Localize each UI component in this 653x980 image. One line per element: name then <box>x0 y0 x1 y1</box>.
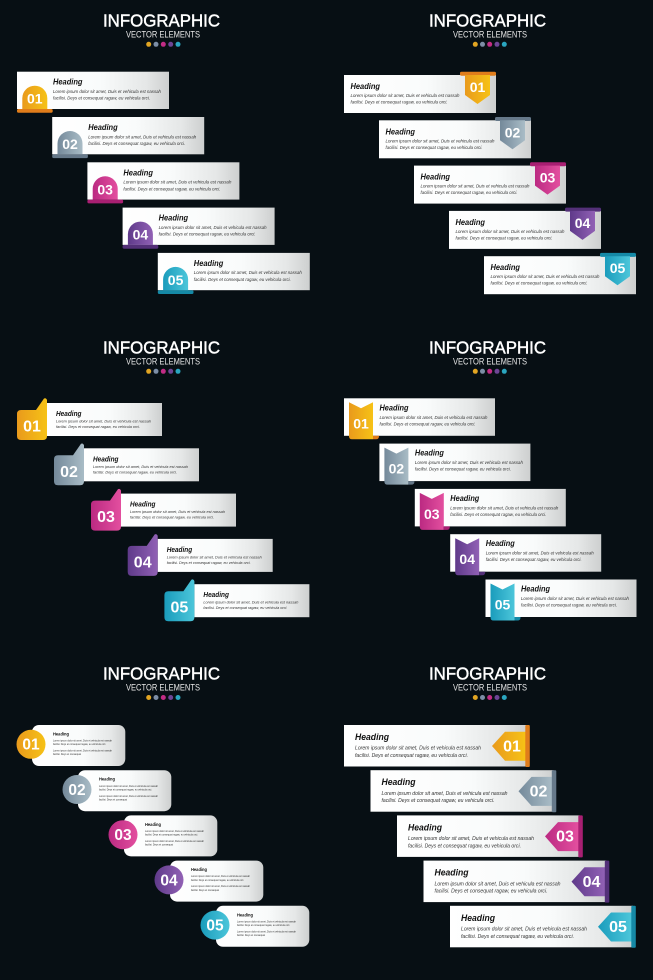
step 02: facilisi. Deys et consequat ragaw, eu vehicula orci. <box>88 141 185 146</box>
step 02 <box>52 117 204 158</box>
step 01: 01 <box>353 415 369 431</box>
step 03 <box>87 162 239 203</box>
step 04: Lorem ipsum dolor sit amet, Duis et vehicula est nassah <box>191 874 251 878</box>
step 05: Lorem ipsum dolor sit amet, Duis et vehicula est nassah <box>490 274 600 279</box>
step 04: facilisi. Deys et consequat ragaw, eu vehicula orci. <box>167 561 251 565</box>
panel: infographic 2 <box>344 10 636 294</box>
step 01: 01 <box>27 91 43 107</box>
step 04: 04 <box>160 872 178 889</box>
step 02: Lorem ipsum dolor sit amet, Duis et vehicula est nassah <box>88 134 197 139</box>
step 01 <box>344 398 495 439</box>
step 01 <box>344 72 496 113</box>
step 05: Lorem ipsum dolor sit amet, Duis et vehicula est nassah <box>194 270 302 275</box>
step 02: 02 <box>530 784 548 801</box>
step 05: Heading <box>194 259 223 268</box>
step 01: Heading <box>53 732 69 736</box>
step 01: Heading <box>56 411 82 418</box>
step 03: facilisi. Deys et consequat ragaw, eu vehicula orci. <box>450 512 546 517</box>
step 04: facilisi. Deys et consequat ragaw, eu vehicula orci. <box>486 557 582 562</box>
step 02: Lorem ipsum dolor sit amet, Duis et vehicula est nassah <box>382 791 508 797</box>
step 02 <box>370 770 556 812</box>
title block <box>429 10 546 47</box>
step 03 <box>397 815 583 857</box>
step 04: Heading <box>486 539 515 548</box>
step 03: Heading <box>145 822 161 827</box>
step 05: 05 <box>206 917 224 934</box>
step 02: Lorem ipsum dolor sit amet, Duis et vehicula est nassah <box>99 784 159 788</box>
step 01: facilisi. Deys et consequat ragaw, eu vehicula orci. <box>56 425 140 429</box>
step 02: Heading <box>99 777 115 782</box>
step 03 <box>91 489 236 531</box>
step 04: Lorem ipsum dolor sit amet, Duis et vehicula est nassah <box>159 225 267 230</box>
step 02: facilisi. Deys et consequat ragaw, eu vehicula orci. <box>93 470 177 474</box>
step 03: 03 <box>424 506 440 522</box>
step 03 <box>108 815 217 856</box>
step 02: 02 <box>62 136 78 152</box>
title block <box>429 664 546 700</box>
step 04: Heading <box>456 218 485 227</box>
step 02: facilisi. Deys et consequat <box>99 797 127 801</box>
step 03: 03 <box>540 170 555 186</box>
step 03: Lorem ipsum dolor sit amet, Duis et vehicula est nassah <box>123 180 232 185</box>
title block: VECTOR ELEMENTS <box>453 29 527 39</box>
step 05: facilisi. Deys et consequat ragaw, eu vehicula orci. <box>461 934 574 940</box>
title block <box>103 338 220 374</box>
step 05: Heading <box>521 584 550 594</box>
step 01: facilisi. Deys et consequat ragaw, eu vehicula orci. <box>380 421 476 426</box>
step 05: 05 <box>171 600 188 617</box>
step 01: Lorem ipsum dolor sit amet, Duis et vehicula est nassah <box>56 420 151 424</box>
step 05 <box>484 253 636 294</box>
step 04: Lorem ipsum dolor sit amet, Duis et vehicula est nassah <box>434 881 561 887</box>
title block <box>429 338 546 374</box>
step 04 <box>449 208 601 249</box>
step 03 <box>415 489 566 530</box>
step 03: Heading <box>450 494 479 503</box>
step 05: facilisi. Deys et consequat ragaw, eu vehicula orci. <box>490 281 588 286</box>
step 03: Heading <box>123 168 153 177</box>
step 03: Lorem ipsum dolor sit amet, Duis et vehicula est nassah <box>145 839 205 843</box>
step 02: facilisi. Deys et consequat ragaw, eu vehicula orci. <box>386 145 482 150</box>
step 04 <box>154 861 263 902</box>
step 03: facilisi. Deys et consequat ragaw, eu vehicula orci. <box>123 186 220 191</box>
step 01: Heading <box>380 403 409 412</box>
step 02: Heading <box>93 456 119 463</box>
step 01: 01 <box>470 79 485 95</box>
step 03: Lorem ipsum dolor sit amet, Duis et vehicula est nassah <box>408 836 534 842</box>
step 05: Lorem ipsum dolor sit amet, Duis et vehicula est nassah <box>203 601 298 605</box>
step 01: Lorem ipsum dolor sit amet, Duis et vehicula est nassah <box>355 746 481 752</box>
step 04 <box>450 534 601 575</box>
step 04 <box>128 534 273 576</box>
step 03: facilisi. Deys et consequat <box>145 843 173 847</box>
step 05: facilisi. Deys et consequat ragaw, eu vehicula orci. <box>194 277 291 282</box>
step 01: Lorem ipsum dolor sit amet, Duis et vehicula est nassah <box>53 739 113 743</box>
step 05: Lorem ipsum dolor sit amet, Duis et vehicula est nassah <box>237 929 297 933</box>
step 03: 03 <box>114 827 132 844</box>
step 03: facilisi. Deys et consequat ragaw, eu vehicula orci. <box>130 516 214 520</box>
step 03: facilisi. Deys et consequat ragaw, eu vehicula orci. <box>420 190 518 195</box>
step 02 <box>379 444 530 485</box>
step 04: Lorem ipsum dolor sit amet, Duis et vehicula est nassah <box>191 884 251 888</box>
step 01: Lorem ipsum dolor sit amet, Duis et vehicula est nassah <box>350 93 460 98</box>
step 04: facilisi. Deys et consequat <box>191 888 219 892</box>
panel: infographic 5 <box>16 664 309 947</box>
step 02: Lorem ipsum dolor sit amet, Duis et vehicula est nassah <box>99 794 159 798</box>
step 04: facilisi. Deys et consequat ragaw, eu vehicula orci. <box>456 235 552 240</box>
step 04: facilisi. Deys et consequat ragaw, eu vehicula orci. <box>159 232 256 237</box>
title block: VECTOR ELEMENTS <box>126 356 200 366</box>
step 03: Lorem ipsum dolor sit amet, Duis et vehicula est nassah <box>420 184 530 189</box>
step 04: 04 <box>459 551 475 567</box>
step 04 <box>424 861 609 903</box>
step 01: facilisi. Deys et consequat ragaw, eu vehicula orci. <box>350 100 448 104</box>
step 01: facilisi. Deys et consequat ragaw, eu vehicula orci. <box>53 742 106 746</box>
step 04: 04 <box>575 215 590 231</box>
step 02: Lorem ipsum dolor sit amet, Duis et vehicula est nassah <box>386 138 495 143</box>
panel: infographic 3 <box>17 338 309 621</box>
step 01: 01 <box>22 737 40 754</box>
step 05: Heading <box>490 263 520 272</box>
step 04: Lorem ipsum dolor sit amet, Duis et vehicula est nassah <box>167 555 262 559</box>
step 02: Heading <box>88 123 118 132</box>
panel: infographic 6 <box>344 664 636 948</box>
step 02 <box>62 770 171 811</box>
step 03: facilisi. Deys et consequat ragaw, eu vehicula orci. <box>408 843 521 849</box>
step 03: Heading <box>408 822 442 832</box>
step 03: 03 <box>97 509 115 526</box>
step 05 <box>486 580 636 620</box>
title block: INFOGRAPHIC <box>429 10 546 30</box>
step 01: Lorem ipsum dolor sit amet, Duis et vehicula est nassah <box>53 89 162 94</box>
title block: VECTOR ELEMENTS <box>453 682 527 692</box>
step 02: 02 <box>60 464 78 481</box>
step 01 <box>17 72 169 113</box>
step 05: Lorem ipsum dolor sit amet, Duis et vehicula est nassah <box>521 596 630 601</box>
step 05: 05 <box>495 596 510 612</box>
step 05: facilisi. Deys et consequat ragaw, eu vehicula orci. <box>237 923 290 927</box>
step 02 <box>379 117 531 158</box>
step 02: Lorem ipsum dolor sit amet, Duis et vehicula est nassah <box>415 460 524 465</box>
step 02: Heading <box>386 127 415 136</box>
step 01: 01 <box>23 418 41 436</box>
title block: INFOGRAPHIC <box>103 338 220 358</box>
step 02: Heading <box>382 777 416 787</box>
step 04: facilisi. Deys et consequat ragaw, eu vehicula orci. <box>191 878 244 882</box>
step 03: 03 <box>556 829 574 846</box>
step 05: Lorem ipsum dolor sit amet, Duis et vehicula est nassah <box>237 919 297 923</box>
step 04: 04 <box>583 874 600 891</box>
step 01: Heading <box>355 732 389 742</box>
step 04: 04 <box>134 554 152 571</box>
step 05 <box>158 253 310 294</box>
step 05: 05 <box>168 272 184 288</box>
step 05: Heading <box>461 913 495 923</box>
title block: INFOGRAPHIC <box>429 664 546 684</box>
title block: INFOGRAPHIC <box>103 664 220 684</box>
step 04: Lorem ipsum dolor sit amet, Duis et vehicula est nassah <box>456 229 565 234</box>
step 03: Heading <box>130 502 156 509</box>
step 01 <box>16 725 125 766</box>
step 01: facilisi. Deys et consequat ragaw, eu vehicula orci. <box>355 753 468 759</box>
step 05 <box>164 579 309 621</box>
step 04: facilisi. Deys et consequat ragaw, eu vehicula orci. <box>434 889 548 895</box>
step 03: Heading <box>420 173 450 182</box>
step 01: 01 <box>503 738 521 755</box>
step 02: 02 <box>505 124 520 140</box>
step 04: Heading <box>167 547 193 554</box>
step 02: Heading <box>415 449 444 458</box>
step 05 <box>200 906 309 947</box>
step 02: facilisi. Deys et consequat ragaw, eu vehicula orci. <box>99 787 152 791</box>
step 01 <box>17 398 162 440</box>
title block: VECTOR ELEMENTS <box>126 29 200 39</box>
step 05: facilisi. Deys et consequat ragaw, eu vehicula orci. <box>203 606 287 610</box>
step 05: Heading <box>237 912 253 917</box>
step 01: Heading <box>53 78 83 87</box>
step 05: facilisi. Deys et consequat <box>237 933 265 937</box>
title block <box>103 664 220 700</box>
step 01: facilisi. Deys et consequat <box>53 752 81 756</box>
title block: INFOGRAPHIC <box>429 338 546 358</box>
step 04: Heading <box>434 868 469 878</box>
step 05: 05 <box>609 919 627 936</box>
step 04: 04 <box>133 227 148 243</box>
step 02: 02 <box>68 782 86 799</box>
step 01 <box>344 725 530 767</box>
step 03: Lorem ipsum dolor sit amet, Duis et vehicula est nassah <box>450 505 559 510</box>
step 02: Lorem ipsum dolor sit amet, Duis et vehicula est nassah <box>93 465 188 469</box>
step 03: 03 <box>97 181 113 197</box>
step 01: Lorem ipsum dolor sit amet, Duis et vehicula est nassah <box>380 415 488 420</box>
step 05: facilisi. Deys et consequat ragaw, eu vehicula orci. <box>521 602 617 608</box>
step 05 <box>450 906 636 948</box>
step 05: Heading <box>203 592 230 599</box>
step 04: Heading <box>191 867 207 872</box>
step 02: facilisi. Deys et consequat ragaw, eu vehicula orci. <box>382 798 494 804</box>
panel: infographic 1 <box>17 10 310 294</box>
step 01: Lorem ipsum dolor sit amet, Duis et vehicula est nassah <box>53 749 113 753</box>
step 04 <box>123 208 275 249</box>
step 03: Lorem ipsum dolor sit amet, Duis et vehicula est nassah <box>145 829 205 833</box>
step 04: Heading <box>159 214 188 223</box>
step 03: facilisi. Deys et consequat ragaw, eu vehicula orci. <box>145 833 198 837</box>
title block <box>103 10 220 47</box>
title block: VECTOR ELEMENTS <box>126 682 200 692</box>
step 03: Lorem ipsum dolor sit amet, Duis et vehicula est nassah <box>130 510 225 514</box>
step 03 <box>414 162 566 204</box>
step 05: Lorem ipsum dolor sit amet, Duis et vehicula est nassah <box>461 926 587 932</box>
step 02: 02 <box>389 461 404 477</box>
step 04: Lorem ipsum dolor sit amet, Duis et vehicula est nassah <box>486 551 594 556</box>
title block: VECTOR ELEMENTS <box>453 356 527 366</box>
title block: INFOGRAPHIC <box>103 10 220 30</box>
step 02 <box>54 444 199 485</box>
panel: infographic 4 <box>344 338 636 620</box>
step 02: facilisi. Deys et consequat ragaw, eu vehicula orci. <box>415 467 511 472</box>
step 05: 05 <box>610 260 625 276</box>
step 01: facilisi. Deys et consequat ragaw, eu vehicula orci. <box>53 96 150 101</box>
step 01: Heading <box>350 82 380 91</box>
